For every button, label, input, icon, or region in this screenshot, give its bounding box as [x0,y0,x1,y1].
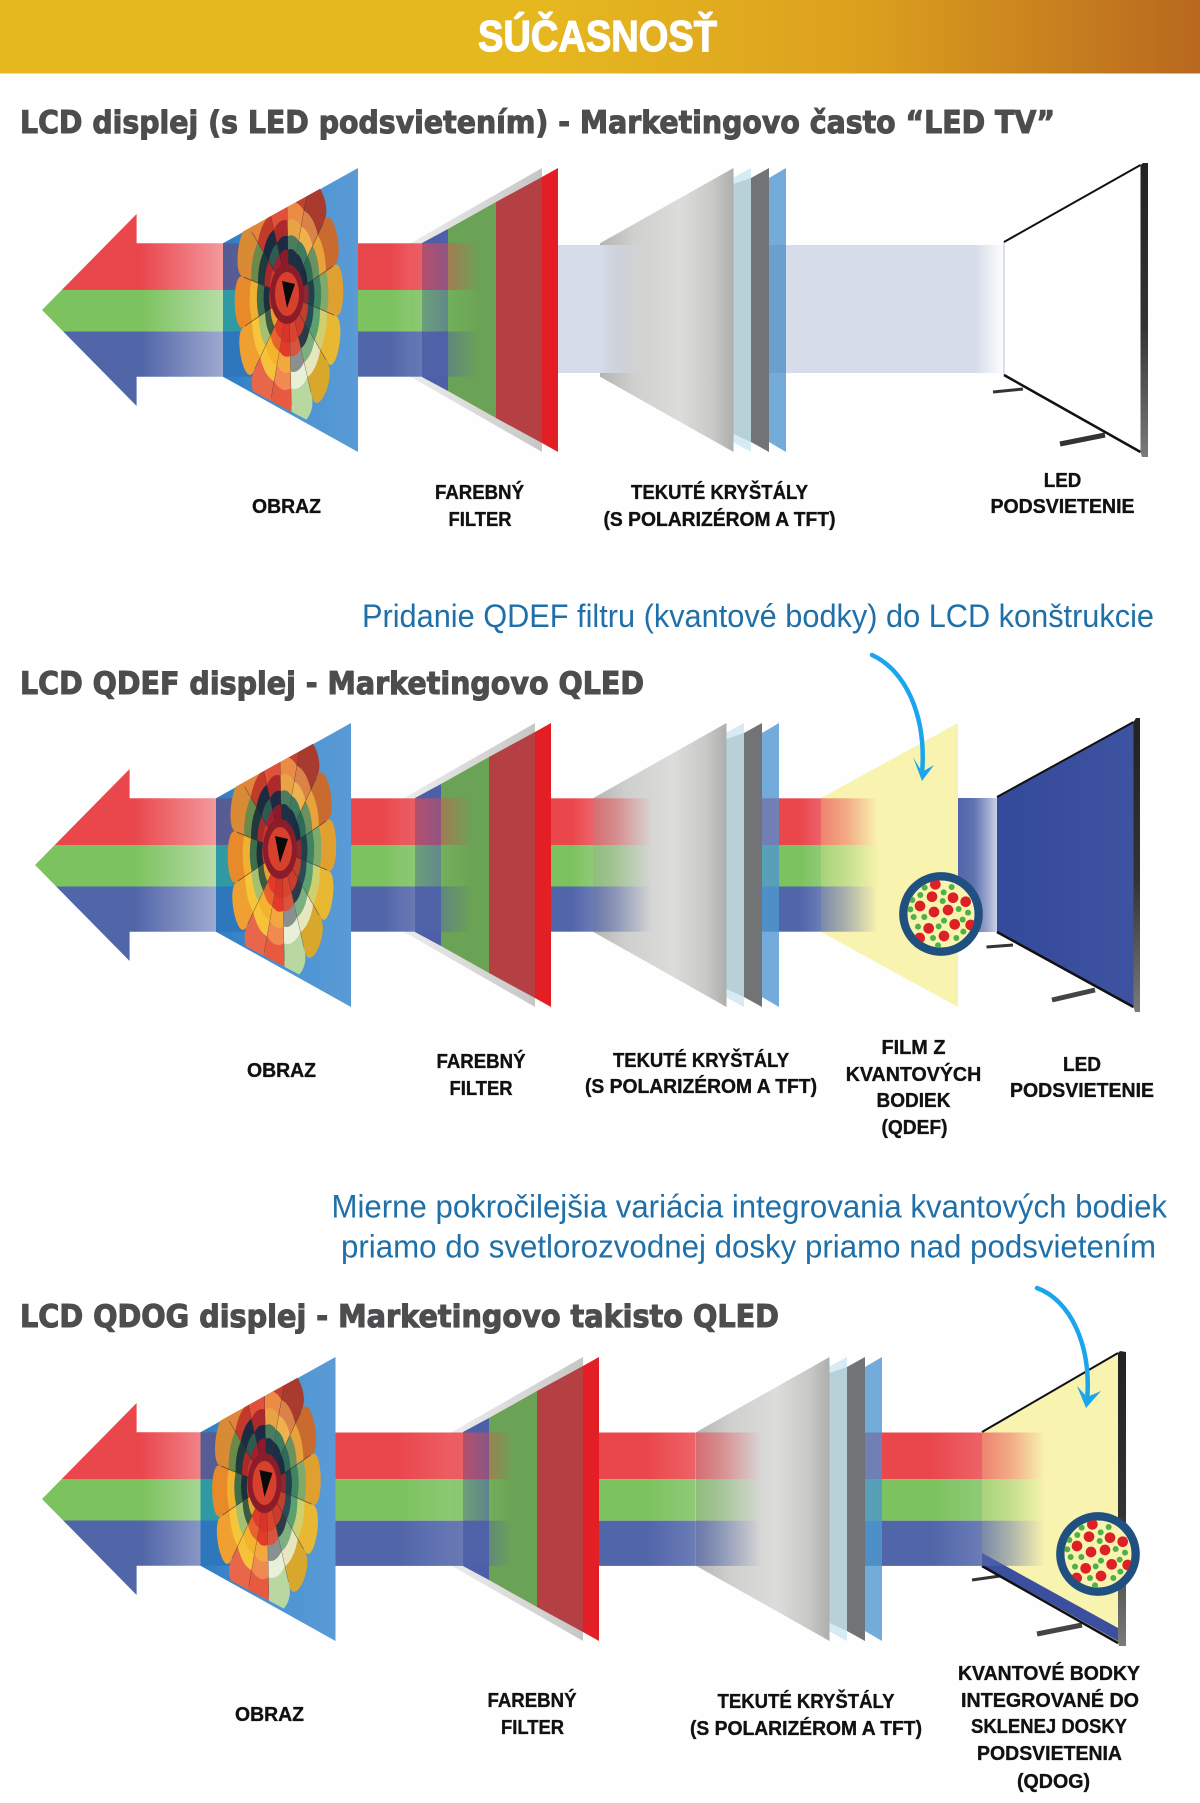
label: quantum dot film [846,1037,981,1139]
layer: colour filter [404,723,551,1007]
light beam to liquid crystals [599,1432,762,1566]
layer: quantum dot film [821,723,958,1007]
label: image: OBRAZ [247,1060,316,1082]
panel: LCD QDEF display [20,655,1154,1139]
callout: QDOG variation: priamo do svetlorozvodnej dosky priamo nad podsvietením [341,1228,1156,1264]
arrow: RGB light output [35,769,216,961]
white light beam [558,245,1004,373]
label: colour filter [436,1049,526,1100]
label: quantum dots in glass: INTEGROVANÉ DO [961,1689,1139,1712]
light beam to liquid crystals [551,798,652,932]
light beam to colour filter [351,798,473,932]
label: liquid crystals: TEKUTÉ KRYŠTÁLY [613,1048,790,1072]
label: quantum dot film: KVANTOVÝCH [846,1062,981,1086]
callout: QDOG variation: Mierne pokročilejšia variácia integrovania kvantových bodiek [332,1188,1168,1224]
label: quantum dots in glass: (QDOG) [1017,1771,1090,1793]
layer: liquid crystals [593,723,779,1007]
label: colour filter [435,480,525,531]
layer: image [216,718,351,1007]
label: liquid crystals: (S POLARIZÉROM A TFT) [604,508,836,531]
label: liquid crystals [604,480,836,531]
label: colour filter: FAREBNÝ [436,1049,526,1073]
label: colour filter: FILTER [448,509,512,531]
layer: colour filter [452,1357,599,1641]
layer: image [223,163,358,452]
label: quantum dots in glass: PODSVIETENIA [977,1743,1122,1765]
arrow: RGB light output [42,1403,223,1595]
light beam to QDOG panel [882,1432,1045,1566]
banner title: SÚČASNOSŤ [478,10,717,61]
label: colour filter: FAREBNÝ [488,1688,577,1712]
label: LED backlight: PODSVIETENIE [990,496,1134,518]
label: liquid crystals: (S POLARIZÉROM A TFT) [690,1717,922,1740]
arrow: points to film [872,655,934,781]
label: LED backlight: LED [1044,470,1081,492]
label: image: OBRAZ [235,1704,304,1726]
panel: LCD QDOG display [20,1288,1141,1793]
label: colour filter [488,1688,577,1739]
label: liquid crystals [585,1048,817,1098]
label: quantum dot film: FILM Z [882,1037,946,1059]
header banner [0,0,1200,74]
magnifier: quantum dots [1060,1516,1136,1592]
label: quantum dots in glass: SKLENEJ DOSKY [971,1716,1128,1738]
arrow: RGB light output [42,214,223,406]
heading: LCD QDEF: LCD QDEF displej - Marketingovo QLED [20,666,644,702]
blue backlight beam [958,798,997,932]
panel: LCD display with LED backlight [20,105,1148,531]
beam through polarizer [865,1432,882,1566]
layer: colour filter [411,168,558,452]
label: colour filter: FILTER [450,1078,513,1100]
layer: LED backlight TV [993,163,1148,457]
label: colour filter: FILTER [501,1717,565,1739]
label: colour filter: FAREBNÝ [435,480,525,504]
label: quantum dot film: (QDEF) [882,1117,948,1139]
layer: liquid crystals [600,168,786,452]
label: LED backlight: LED [1063,1054,1101,1076]
arrow: points to glass [1037,1288,1101,1408]
label: liquid crystals: (S POLARIZÉROM A TFT) [585,1075,817,1098]
light beam to quantum dot film [779,798,878,932]
layer: LED backlight TV [986,718,1140,1012]
label: image: OBRAZ [252,496,321,518]
callout: adding QDEF filter: Pridanie QDEF filtru (kvantové bodky) do LCD konštrukcie [362,598,1154,634]
light beam to colour filter [358,243,480,377]
label: liquid crystals: TEKUTÉ KRYŠTÁLY [718,1689,895,1713]
light beam to colour filter [336,1432,513,1566]
beam through polarizer [762,798,779,932]
layer: liquid crystals [696,1357,882,1641]
label: LED backlight [1010,1054,1154,1102]
label: quantum dot film: BODIEK [876,1090,951,1112]
layer: QDOG TV [972,1351,1126,1646]
heading: LCD display: LCD displej (s LED podsvietením) - Marketingovo často “LED TV” [20,105,1055,141]
label: quantum dots in glass: KVANTOVÉ BODKY [958,1662,1141,1685]
label: LED backlight: PODSVIETENIE [1010,1080,1154,1102]
label: LED backlight [990,470,1134,518]
magnifier: quantum dots [903,876,979,952]
callout: QDOG variation [332,1188,1168,1264]
label: liquid crystals [690,1689,922,1740]
label: liquid crystals: TEKUTÉ KRYŠTÁLY [631,480,809,504]
heading: LCD QDOG: LCD QDOG displej - Marketingovo takisto QLED [20,1299,779,1335]
label: quantum dots in glass [958,1662,1141,1793]
layer: image [200,1352,336,1641]
